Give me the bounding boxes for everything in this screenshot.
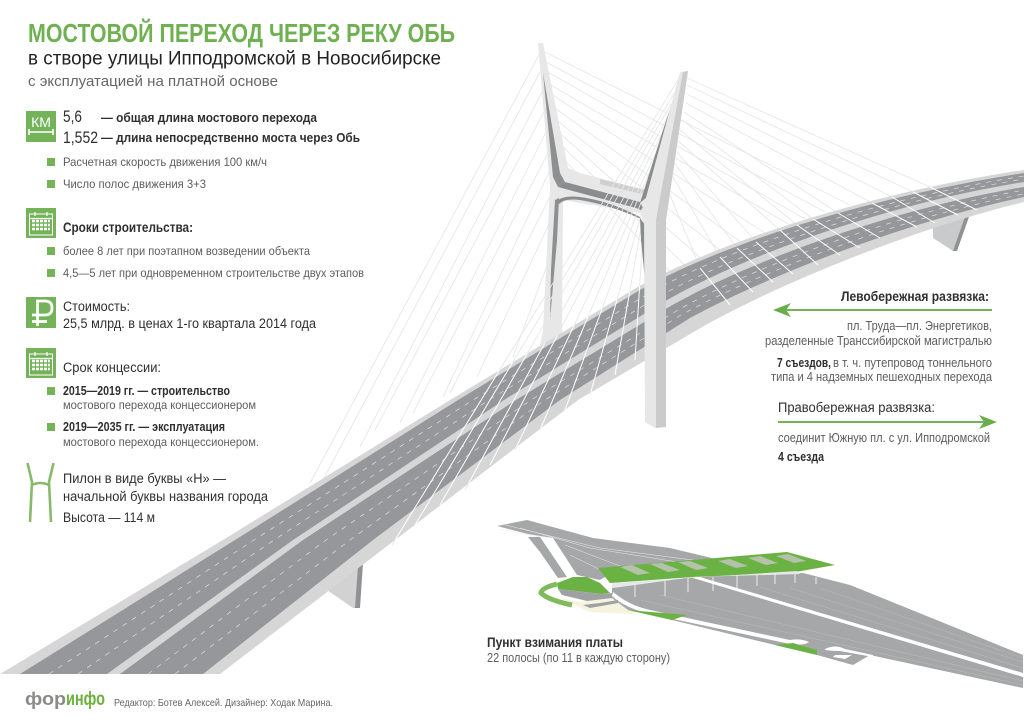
toll plaza caption: 22 полосы (по 11 в каждую сторону) [487, 651, 670, 665]
cables: near pylon left fan [392, 80, 678, 545]
approach lane lines [500, 525, 700, 572]
logo [25, 689, 105, 710]
toll booth roofs [620, 554, 806, 575]
icon: kilometres: КМ [31, 114, 51, 130]
bullet: lanes [47, 180, 55, 188]
block: length [26, 107, 360, 191]
bullet: simultaneous [47, 269, 55, 277]
block: cost: Стоимость: [63, 299, 130, 314]
plaza surface [612, 573, 1023, 688]
arrow: right [778, 415, 997, 429]
block: length: Расчетная скорость движения 100 км/ч [63, 155, 267, 169]
block: left-bank interchange: 7 съездов, [777, 356, 831, 370]
plaza lane lines [640, 587, 1023, 685]
toll plaza caption: Пункт взимания платы [487, 635, 623, 650]
block: pylon: Пилон в виде буквы «Н» — [63, 471, 226, 486]
block: cost [26, 297, 316, 331]
block: construction time: более 8 лет при поэтапном возведении объекта [63, 244, 310, 258]
pier: right [933, 214, 970, 251]
block: concession: Срок концессии: [63, 360, 161, 375]
block: construction time [26, 208, 364, 280]
logo: фор [25, 689, 66, 709]
block: construction time: 4,5—5 лет при одновременном строительстве двух этапов [63, 266, 364, 280]
block: left-bank interchange: разделенные Транссибирской магистралью [765, 334, 992, 348]
block: length: — длина непосредственно моста через Обь [101, 131, 360, 145]
white divider strips [612, 575, 1023, 677]
block: concession [26, 348, 259, 449]
block: concession: 2019—2035 гг. — эксплуатация [63, 420, 225, 434]
icon: rouble [26, 297, 56, 328]
approach road [497, 520, 720, 580]
lane markings [49, 176, 1024, 674]
icon: calendar [26, 208, 56, 238]
green verges [628, 610, 687, 620]
block: left-bank interchange: в т. ч. путепровод тоннельного [833, 356, 992, 370]
block: length: Число полос движения 3+3 [63, 177, 206, 191]
beige ground [560, 598, 642, 614]
total length: 5,6 [63, 107, 82, 126]
hill retaining wall [558, 589, 612, 601]
arrow: left [773, 303, 992, 317]
block: pylon: Высота — 114 м [63, 510, 155, 525]
title: МОСТОВОЙ ПЕРЕХОД ЧЕРЕЗ РЕКУ ОБЬ [28, 18, 455, 48]
block: right-bank interchange [778, 400, 997, 464]
block: left-bank interchange: типа и 4 надземных пешеходных перехода [771, 370, 992, 384]
block: pylon [28, 463, 268, 525]
icon: H pylon [28, 463, 54, 522]
block: length: — общая длина мостового перехода [101, 111, 318, 125]
block: concession: мостового перехода концессионером [63, 398, 256, 412]
green hill [557, 577, 610, 594]
block: construction time: Сроки строительства: [63, 220, 193, 235]
bridge deck [0, 170, 1024, 674]
block: left-bank interchange [765, 289, 992, 384]
block: right-bank interchange: 4 съезда [778, 450, 825, 464]
bullet: operation period [47, 423, 55, 431]
credits: Редактор: Ботев Алексей. Дизайнер: Ходак Марина. [114, 697, 333, 709]
bullet: speed [47, 158, 55, 166]
block: right-bank interchange: соединит Южную пл. с ул. Ипподромской [778, 431, 990, 445]
block: cost: 25,5 млрд. в ценах 1-го квартала 2014 года [63, 316, 316, 331]
overpass [612, 571, 800, 588]
carriageway: lower [120, 187, 1024, 674]
bullet: phased [47, 247, 55, 255]
near pylon [640, 71, 688, 428]
cables: far pylon right fan [545, 52, 850, 277]
block: left-bank interchange: Левобережная развязка: [841, 289, 989, 304]
overpass supports [635, 574, 816, 597]
green roof area [598, 552, 835, 583]
block: pylon: начальной буквы названия города [63, 489, 268, 504]
green ring [541, 584, 572, 605]
logo: инфо [66, 689, 105, 710]
cables over deck [394, 187, 978, 540]
subtitle: в створе улицы Ипподромской в Новосибирске [28, 48, 441, 70]
far pylon [538, 43, 645, 345]
side ramp [528, 537, 567, 578]
carriageway: upper [20, 173, 1024, 674]
icon: calendar [26, 348, 56, 378]
bullet: build period [47, 387, 55, 395]
tagline: с эксплуатацией на платной основе [28, 73, 278, 90]
block: concession: мостового перехода концессионером. [63, 435, 259, 449]
block: left-bank interchange: пл. Труда—пл. Энергетиков, [847, 319, 992, 333]
toll plaza illustration [497, 520, 1023, 688]
icon: kilometres [26, 111, 56, 142]
block: concession: 2015—2019 гг. — строительство [63, 384, 230, 398]
cables: far pylon left fan [310, 53, 552, 483]
block: right-bank interchange: Правобережная развязка: [778, 400, 935, 415]
pier: left [327, 563, 363, 608]
cables: near pylon right fan [668, 78, 930, 268]
bridge length: 1,552 [63, 128, 98, 147]
toll plaza caption [487, 635, 670, 665]
